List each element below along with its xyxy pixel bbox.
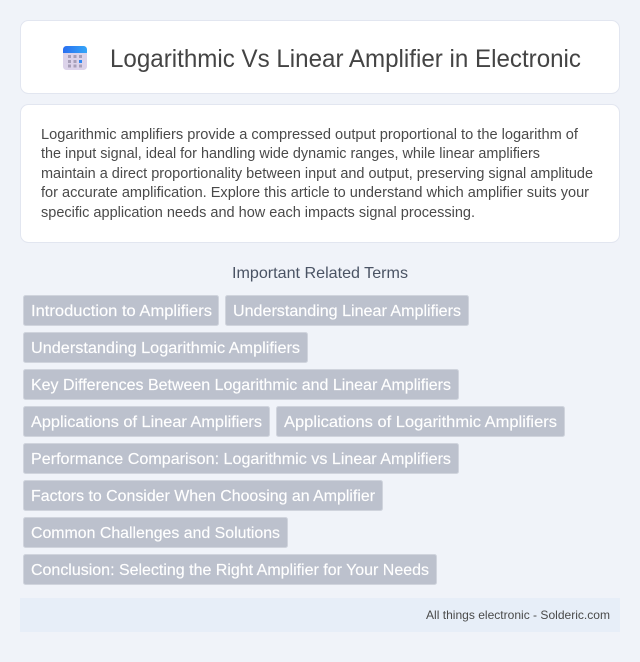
tag: Understanding Linear Amplifiers <box>233 303 461 320</box>
footer credit: All things electronic - Solderic.com <box>426 608 610 622</box>
heading: related terms: Important Related Terms <box>232 265 408 282</box>
tag <box>24 444 458 474</box>
panel: description: specific application needs and how each impacts signal processing. <box>41 205 475 221</box>
tag <box>276 406 564 436</box>
tag <box>24 480 382 510</box>
tag <box>24 554 436 584</box>
tag <box>24 296 218 326</box>
tag: Key Differences Between Logarithmic and Linear Amplifiers <box>31 377 451 394</box>
tag: Factors to Consider When Choosing an Amplifier <box>31 488 376 505</box>
tag: Conclusion: Selecting the Right Amplifier for Your Needs <box>31 562 429 579</box>
tag <box>24 370 458 400</box>
panel: description: Logarithmic amplifiers provide a compressed output proportional to the logarithm of <box>41 127 579 143</box>
icon: calendar <box>63 46 87 70</box>
panel: description: the input signal, ideal for handling wide dynamic ranges, while linear amplifiers <box>41 146 540 162</box>
tag <box>24 332 308 362</box>
footer bar <box>20 598 620 632</box>
panel: description <box>20 104 620 242</box>
tags list <box>24 296 564 584</box>
tag: Common Challenges and Solutions <box>31 525 280 542</box>
tag: Introduction to Amplifiers <box>31 303 212 320</box>
tag <box>226 296 468 326</box>
panel: description: maintain a direct proportionality between input and output, preserving signal amplitude <box>41 166 593 182</box>
tag: Performance Comparison: Logarithmic vs Linear Amplifiers <box>31 451 451 468</box>
tag: Applications of Linear Amplifiers <box>31 414 262 431</box>
panel: description: for accurate amplification. Explore this article to understand which amplifier suits your <box>41 185 589 201</box>
title: Logarithmic Vs Linear Amplifier in Electronic <box>110 45 581 73</box>
header panel <box>20 20 620 94</box>
tag <box>24 406 270 436</box>
tag <box>24 518 288 548</box>
tag: Applications of Logarithmic Amplifiers <box>284 414 557 431</box>
tag: Understanding Logarithmic Amplifiers <box>31 340 300 357</box>
